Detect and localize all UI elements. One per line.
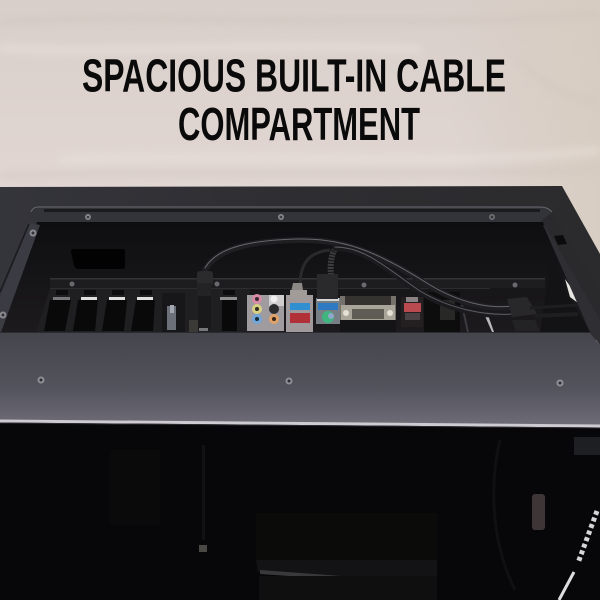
rear expansion slots [36, 289, 250, 332]
front panel screws [38, 376, 564, 386]
red USB port [401, 297, 423, 327]
slot ledge [50, 278, 545, 289]
USB and ethernet panel [286, 295, 313, 332]
compartment right rail [543, 212, 600, 345]
mounting hole [71, 249, 125, 269]
USB and PS2 panel [316, 298, 340, 324]
case lower glass window [0, 420, 600, 600]
braided white cable [559, 511, 597, 600]
HDMI and USB cable plugs [290, 249, 338, 299]
audio jack panel [247, 294, 284, 331]
case top panel [0, 186, 600, 340]
front panel [0, 332, 600, 428]
title [82, 50, 506, 150]
cable clip [507, 297, 578, 331]
graphics card DVI port [162, 293, 185, 332]
compartment left rail [0, 223, 40, 335]
motherboard components [424, 292, 494, 332]
compartment top rail [30, 207, 552, 222]
title: COMPARTMENT [178, 98, 420, 150]
power supply shroud [256, 513, 437, 600]
video ports panel [340, 296, 396, 332]
rear right interior [540, 255, 590, 332]
fan at right [494, 437, 600, 590]
ethernet cable plug [189, 271, 213, 332]
routed cables [205, 239, 514, 315]
cable compartment opening [0, 222, 592, 332]
rear screws [70, 282, 518, 288]
